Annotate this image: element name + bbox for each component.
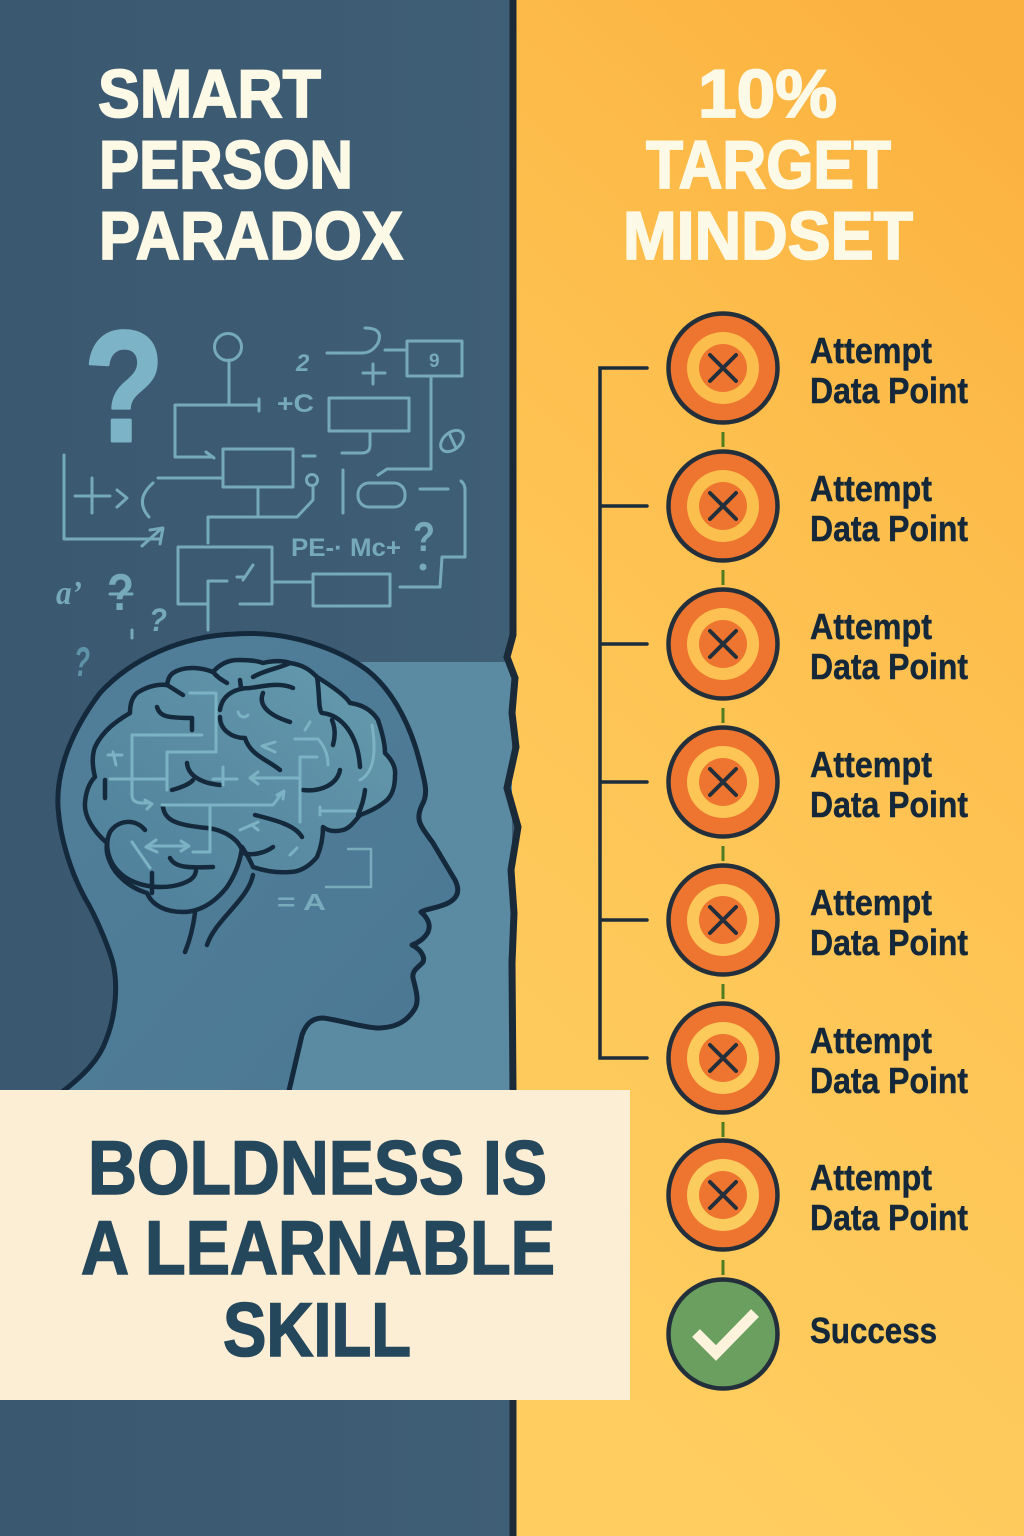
attempt 6: Data Point [810, 1060, 968, 1101]
title: Smart Person Paradox: PARADOX [99, 198, 403, 274]
callout: Boldness is a learnable skill: A LEARNABLE [81, 1206, 555, 1291]
attempt 3: Data Point [810, 646, 968, 687]
light panel behind head [280, 662, 512, 1092]
formula labels: ? [107, 564, 134, 622]
jaw formula [325, 849, 371, 887]
brain outline [85, 660, 395, 912]
title: Smart Person Paradox [98, 56, 403, 274]
flowchart and scribbled formulas [64, 328, 467, 638]
formula labels: 9 [429, 351, 440, 372]
attempt 3: Attempt [810, 606, 932, 647]
attempt 2: Data Point [810, 508, 968, 549]
title: 10% Target Mindset: TARGET [646, 127, 891, 203]
title: 10% Target Mindset: MINDSET [623, 198, 913, 274]
timeline bracket [600, 368, 647, 1058]
connectors between targets [722, 432, 724, 1275]
attempt 7: Attempt [810, 1157, 932, 1198]
head outline [58, 633, 458, 1095]
title: Smart Person Paradox: SMART [98, 56, 321, 132]
formula labels: +C [277, 390, 314, 418]
circuit lines in brain [108, 693, 374, 868]
torn divider line [507, 0, 518, 1536]
formula labels: PE-· Mc+ [291, 534, 401, 562]
formula labels: 2 [295, 350, 310, 377]
success: Success [810, 1310, 937, 1351]
right panel: background [507, 0, 1024, 1536]
head silhouette with brain [58, 633, 458, 1095]
attempt 1 [668, 314, 968, 422]
formula labels: ? [149, 602, 167, 638]
callout: Boldness is a learnable skill [0, 1090, 630, 1400]
attempt 2 [668, 452, 968, 560]
callout: Boldness is a learnable skill: SKILL [223, 1288, 411, 1373]
attempt 1: Attempt [810, 330, 932, 371]
callout: Boldness is a learnable skill: BOLDNESS IS [88, 1126, 547, 1211]
attempt 4: Attempt [810, 744, 932, 785]
attempt 2: Attempt [810, 468, 932, 509]
attempt 6: Attempt [810, 1020, 932, 1061]
title: 10% Target Mindset: 10% [698, 56, 837, 132]
attempt 6 [668, 1004, 968, 1112]
formula labels: ? [74, 638, 90, 685]
brain folds [105, 663, 365, 952]
icon: large question mark: ? [84, 299, 164, 475]
formula labels: a’ [56, 575, 82, 612]
attempt 5 [668, 866, 968, 974]
attempt 7: Data Point [810, 1197, 968, 1238]
attempt 4 [668, 728, 968, 836]
success [668, 1280, 937, 1388]
left panel: background [0, 0, 517, 1536]
attempt 1: Data Point [810, 370, 968, 411]
attempt 7 [668, 1140, 968, 1250]
attempt 4: Data Point [810, 784, 968, 825]
attempt 3 [668, 590, 968, 698]
attempt 5: Data Point [810, 922, 968, 963]
formula labels: ? [413, 513, 435, 560]
formula labels [56, 350, 440, 685]
title: Smart Person Paradox: PERSON [99, 127, 353, 203]
title: 10% Target Mindset [623, 56, 913, 274]
head silhouette with brain: = A [277, 889, 326, 915]
attempt 5: Attempt [810, 882, 932, 923]
